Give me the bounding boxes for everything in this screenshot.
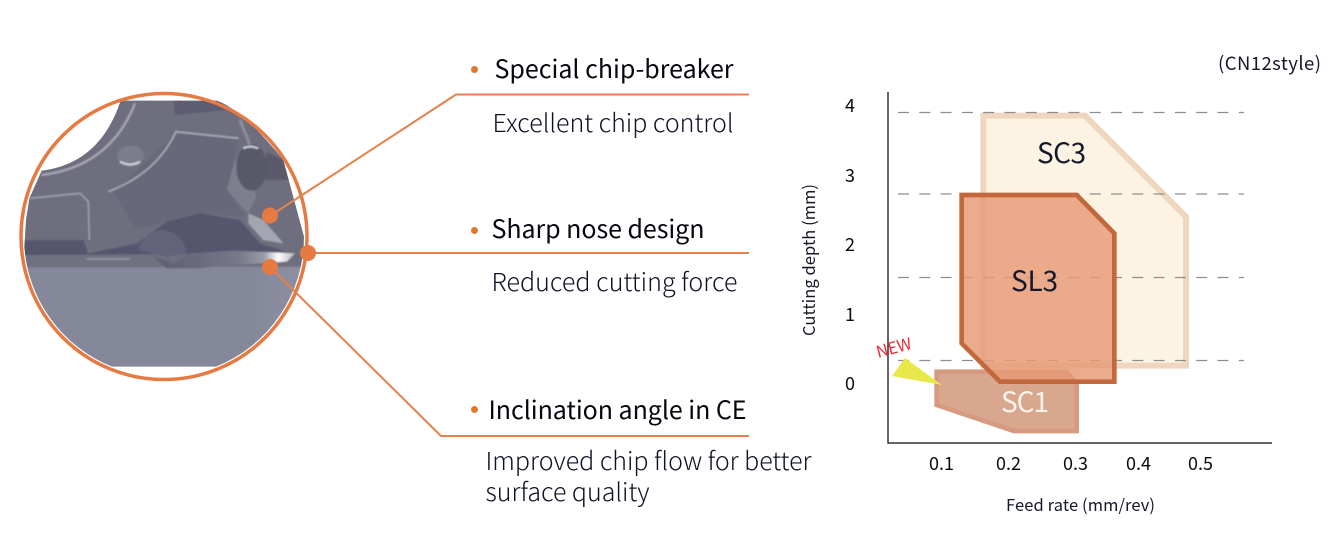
text block: special chip-breaker	[471, 50, 734, 140]
y axis labels: 2	[845, 231, 855, 257]
x axis labels: 0.2	[996, 450, 1021, 476]
region label SL3: SL3	[1011, 260, 1058, 300]
y axis labels	[845, 92, 855, 396]
chart note: CN12 style: (CN12style)	[1218, 50, 1321, 76]
y axis labels: 4	[845, 92, 855, 118]
text block: special chip-breaker: Special chip-breaker	[494, 50, 734, 86]
y axis labels: 1	[845, 301, 855, 327]
x axis labels: 0.1	[929, 450, 954, 476]
leader line: special chip-breaker	[262, 94, 749, 224]
y axis labels: 3	[845, 162, 855, 188]
x axis labels	[929, 450, 1213, 476]
text block: inclination angle: Inclination angle in CE	[488, 391, 746, 427]
new marker arrow	[892, 358, 942, 385]
x axis labels: 0.3	[1063, 450, 1088, 476]
region: SC3	[983, 116, 1186, 366]
x axis labels: 0.5	[1188, 450, 1213, 476]
text block: inclination angle: Improved chip flow for better	[486, 442, 813, 478]
insert photo illustration	[24, 100, 304, 367]
text block: special chip-breaker: Excellent chip control	[492, 104, 734, 140]
leader line: inclination angle	[262, 259, 749, 436]
text block: sharp nose design	[471, 210, 738, 299]
chart: cutting depth vs feed rate	[796, 92, 1272, 516]
region: SL3	[962, 195, 1114, 382]
text block: sharp nose design: Sharp nose design	[492, 210, 704, 246]
axes	[888, 92, 1272, 443]
text block: sharp nose design: Reduced cutting force	[492, 263, 738, 299]
region label SC1: SC1	[1001, 381, 1049, 421]
text block: inclination angle: surface quality	[486, 473, 650, 509]
new label: NEW	[873, 330, 915, 363]
x axis title: Feed rate (mm/rev)	[1006, 492, 1155, 516]
leader line: sharp nose design	[300, 245, 749, 261]
horizontal gridlines	[898, 112, 1244, 360]
y axis title: Cutting depth (mm)	[796, 184, 820, 336]
region label SC3: SC3	[1037, 132, 1086, 172]
region: SC1	[937, 372, 1077, 431]
x axis labels: 0.4	[1126, 450, 1151, 476]
text block: inclination angle	[471, 391, 813, 509]
y axis labels: 0	[845, 370, 855, 396]
lens ring	[21, 94, 307, 380]
panel: insert close-up circle	[13, 93, 313, 380]
